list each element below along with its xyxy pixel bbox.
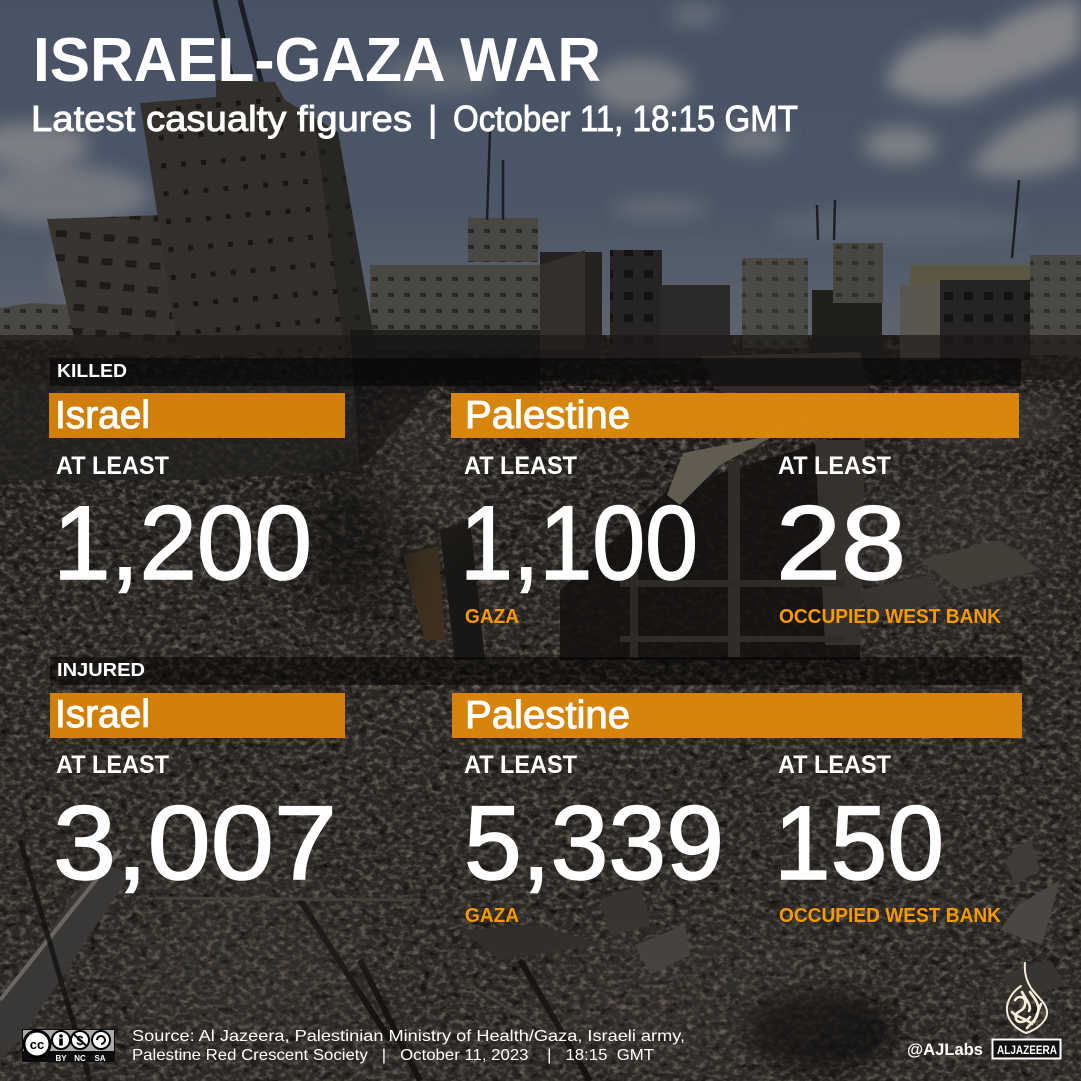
panel: injured in Palestine [452, 693, 1022, 927]
panel: killed in Palestine [451, 393, 1019, 628]
source text: Source: Al Jazeera, Palestinian Ministry of Health/Gaza, Israeli army, [132, 1028, 685, 1045]
icon: creative commons badge: BY [55, 1054, 67, 1063]
panel: injured in Israel: 3,007 [53, 785, 337, 902]
panel: killed in Palestine: AT LEAST [464, 452, 577, 480]
panel: injured in Palestine: GAZA [465, 905, 519, 927]
panel: injured in Palestine: 5,339 [464, 785, 724, 902]
ruined buildings and rubble tones [0, 330, 1081, 1081]
panel: injured in Palestine: Palestine [465, 694, 630, 737]
panel: killed in Israel [49, 393, 345, 602]
icon: Al Jazeera wordmark [992, 1040, 1060, 1058]
title: ISRAEL-GAZA WAR [33, 26, 601, 95]
panel: injured in Israel: AT LEAST [56, 751, 169, 779]
icon: creative commons badge: $ [76, 1033, 84, 1048]
panel: injured in Israel [50, 693, 345, 902]
source text: Palestine Red Crescent Society | October 11, 2023 | 18:15 GMT [132, 1047, 654, 1064]
band: injured: INJURED [57, 659, 145, 680]
band: killed [50, 358, 1021, 386]
subtitle: October 11, 18:15 GMT [453, 98, 798, 139]
panel: killed in Palestine: OCCUPIED WEST BANK [779, 606, 1002, 628]
panel: injured in Palestine: AT LEAST [464, 751, 577, 779]
subtitle: Latest casualty figures [31, 98, 412, 139]
panel: injured in Palestine: 150 [774, 785, 944, 902]
panel: injured in Israel: Israel [55, 693, 150, 736]
ground [0, 335, 1081, 1081]
panel: killed in Israel: AT LEAST [56, 452, 169, 480]
source text [132, 1028, 685, 1064]
panel: killed in Palestine: 1,100 [460, 485, 698, 602]
icon: creative commons badge: SA [94, 1054, 106, 1063]
panel: injured in Palestine: AT LEAST [778, 751, 891, 779]
icon: creative commons badge: cc [30, 1037, 44, 1052]
subtitle [31, 98, 798, 139]
panel: killed in Israel: 1,200 [53, 485, 312, 602]
subtitle: | [428, 98, 437, 139]
panel: injured in Palestine: OCCUPIED WEST BANK [779, 905, 1002, 927]
credit: AJLabs handle: @AJLabs [907, 1041, 983, 1059]
band: injured [50, 657, 1022, 685]
icon: Al Jazeera calligraphy logo [1007, 963, 1047, 1033]
icon: creative commons badge: NC [74, 1054, 86, 1063]
panel: killed in Palestine: GAZA [465, 606, 519, 628]
band: killed: KILLED [57, 360, 127, 381]
panel: killed in Palestine: Palestine [465, 394, 630, 437]
panel: killed in Palestine: 28 [776, 485, 906, 602]
icon: creative commons badge [22, 1029, 115, 1063]
leaning towers [47, 80, 377, 355]
skyline [0, 0, 1081, 362]
icon: Al Jazeera wordmark: ALJAZEERA [997, 1043, 1057, 1057]
panel: killed in Israel: Israel [55, 394, 150, 437]
panel: killed in Palestine: AT LEAST [778, 452, 891, 480]
